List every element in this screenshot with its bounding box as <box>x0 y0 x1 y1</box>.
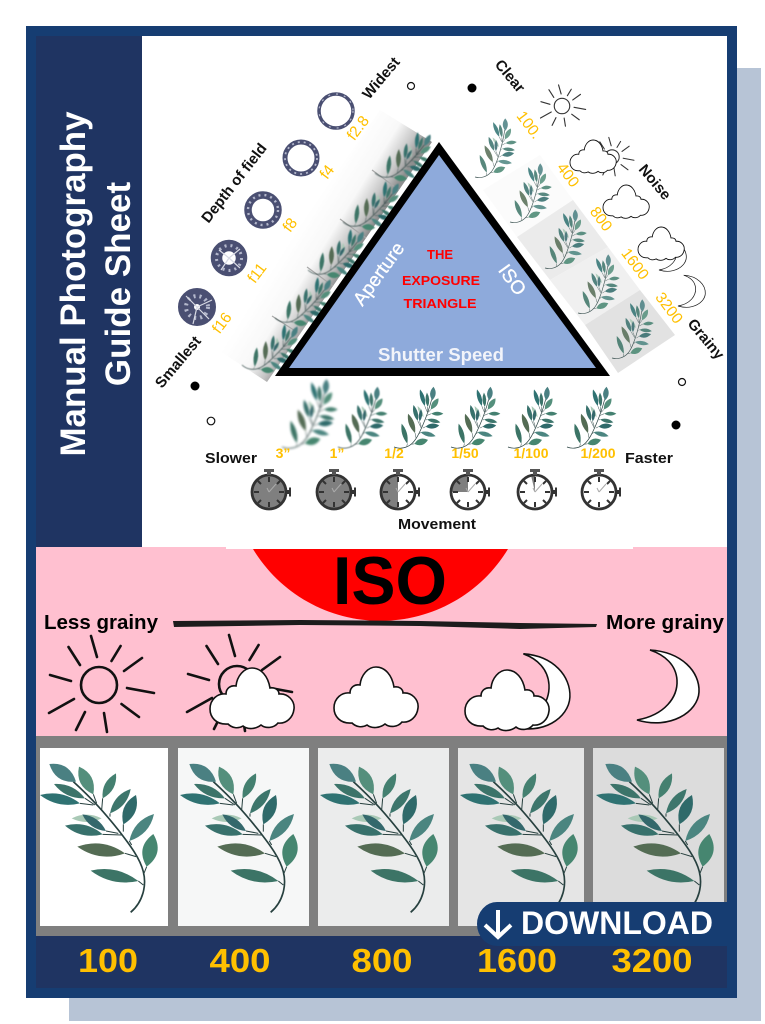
legend dots <box>190 82 686 430</box>
icon: small sun behind cloud <box>570 137 634 176</box>
ISO value labels: 400 <box>553 160 582 191</box>
exposure triangle <box>275 142 610 376</box>
icon: stopwatch quarter <box>451 469 490 509</box>
icon: stopwatch half <box>381 469 420 509</box>
label: more grainy: More grainy <box>606 612 725 634</box>
ISO heading: ISO <box>333 543 447 619</box>
icon: small cloud and moon <box>638 227 686 271</box>
ISO scale labels: Grainy <box>684 316 728 363</box>
triangle title: THE <box>427 247 453 262</box>
aperture scale labels: Smallest <box>152 333 205 392</box>
shutter speed labels: 1/50 <box>451 445 479 461</box>
red semicircle <box>253 549 508 621</box>
ISO scale labels <box>491 56 728 363</box>
icon: small moon <box>678 275 705 307</box>
small weather icons <box>540 85 705 307</box>
ISO value labels <box>513 108 686 327</box>
value 800: 800 <box>352 942 412 979</box>
icon: moon <box>637 650 699 723</box>
white diagram panel background <box>36 36 727 548</box>
triangle title <box>402 247 480 311</box>
side label: shutter speed: Shutter Speed <box>378 345 504 365</box>
title line 2: Guide Sheet <box>99 182 138 386</box>
download label: DOWNLOAD <box>521 905 713 941</box>
photo ISO 800 <box>318 748 449 926</box>
stopwatches <box>252 469 621 509</box>
label: movement: Movement <box>398 516 476 533</box>
aperture scale labels <box>152 54 404 392</box>
label: faster: Faster <box>625 450 673 467</box>
icon: stopwatch sliver <box>518 469 557 509</box>
shutter speed labels: 3” <box>276 445 290 461</box>
icon: download arrow <box>485 910 511 937</box>
shutter speed labels: 1” <box>330 445 344 461</box>
aperture scale labels: Depth of field <box>198 140 271 226</box>
panel: sidebar title <box>36 36 142 547</box>
value 3200: 3200 <box>612 942 692 979</box>
aperture f-stop labels: f2.8 <box>344 113 373 144</box>
aperture f-stop labels: f8 <box>280 215 301 236</box>
icon: sun behind cloud <box>187 635 294 731</box>
ISO value labels: 800 <box>586 204 615 235</box>
panel: aperture strip of blurred leaves <box>215 110 435 382</box>
panel: ISO strip of leaves <box>455 115 675 373</box>
aperture f-stop labels: f11 <box>244 260 270 287</box>
icon: sun <box>49 636 154 732</box>
ISO value labels: 3200 <box>651 289 686 327</box>
title line 1: Manual Photography <box>54 111 93 456</box>
download button <box>477 902 737 946</box>
triangle title: EXPOSURE <box>402 273 480 288</box>
label: slower: Slower <box>205 450 257 467</box>
icon: small sun <box>540 85 586 126</box>
brush line <box>173 620 597 629</box>
value 100: 100 <box>78 942 138 979</box>
icon: small cloud <box>603 185 649 218</box>
photo ISO 400 <box>178 748 309 926</box>
photo ISO 3200 <box>593 748 724 926</box>
aperture scale labels: Widest <box>359 54 404 103</box>
aperture f-stop labels: f16 <box>209 310 236 337</box>
panel: ISO comparison photos <box>36 736 727 936</box>
label: less grainy: Less grainy <box>44 612 159 634</box>
icon: cloud <box>334 667 418 728</box>
photo ISO 100 <box>40 748 168 926</box>
side label: ISO: ISO <box>493 261 530 300</box>
icon: stopwatch full <box>252 469 291 509</box>
shutter speed labels: 1/200 <box>580 445 616 461</box>
ISO scale labels: Noise <box>635 161 674 203</box>
icon: stopwatch empty <box>582 469 621 509</box>
icon: stopwatch full 2 <box>317 469 356 509</box>
panel: ISO header band <box>36 543 727 736</box>
photo ISO 1600 <box>458 748 584 926</box>
ISO scale labels: Clear <box>491 56 528 96</box>
aperture f-stop labels: f4 <box>317 162 338 183</box>
value 1600: 1600 <box>477 942 557 979</box>
ISO value labels: 100. <box>513 108 544 142</box>
side label: aperture: Aperture <box>349 239 409 310</box>
triangle title: TRIANGLE <box>404 296 477 311</box>
icon: cloud and moon <box>465 654 570 731</box>
aperture f-stop labels <box>209 113 373 337</box>
panel: ISO value band <box>36 936 727 988</box>
value 400: 400 <box>210 942 270 979</box>
panel: aperture rings <box>186 94 353 324</box>
ISO value labels: 1600 <box>617 245 652 283</box>
panel: shutter speed leaves <box>262 375 628 458</box>
shutter speed labels: 1/2 <box>384 445 404 461</box>
shutter speed labels: 1/100 <box>513 445 549 461</box>
shutter speed labels <box>276 445 616 461</box>
